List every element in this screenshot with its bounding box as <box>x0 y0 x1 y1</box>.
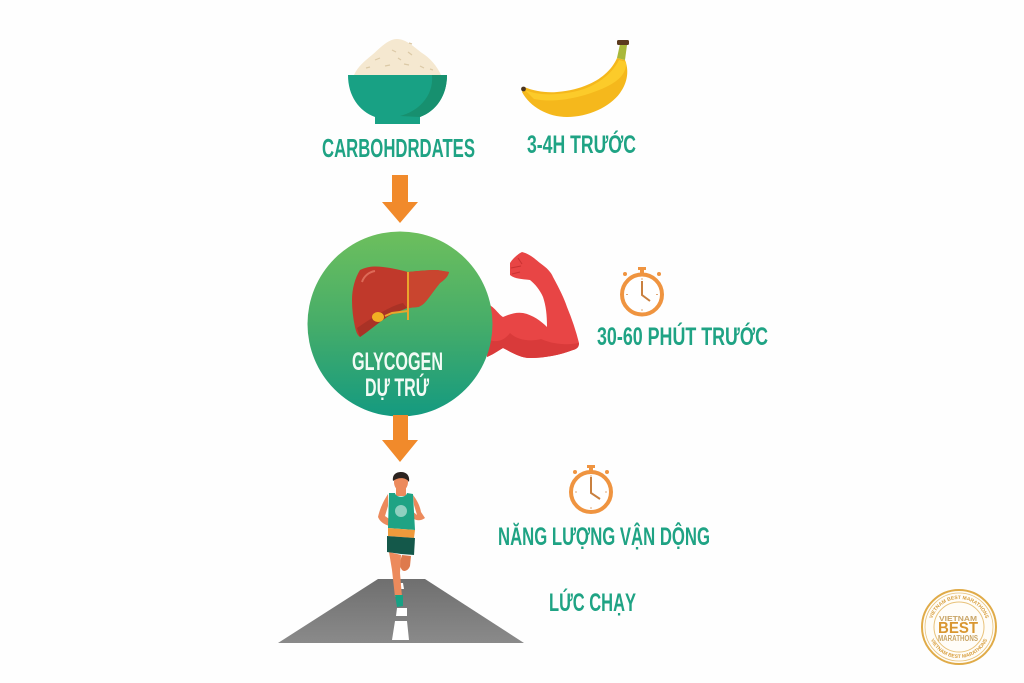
icon: banana <box>521 40 629 117</box>
panel: glycogen circle <box>308 232 492 416</box>
label: reserve: DỰ TRỨ <box>365 372 429 402</box>
badge: best marathons: BEST <box>938 620 978 637</box>
arms <box>378 494 425 526</box>
front leg <box>389 552 402 597</box>
road dashes <box>392 583 409 640</box>
badge: best marathons: VIETNAM BEST MARATHONS <box>929 596 989 618</box>
icon: runner <box>378 472 425 607</box>
singlet <box>388 493 415 530</box>
belt <box>388 528 415 538</box>
badge: best marathons: VIETNAM <box>939 616 977 623</box>
icon: liver <box>352 266 449 337</box>
shoe <box>395 595 403 607</box>
label: glycogen: GLYCOGEN <box>352 348 443 376</box>
label: while running: LỨC CHẠY <box>549 587 636 617</box>
badge: best marathons <box>921 589 997 665</box>
badge: best marathons: MARATHONS <box>938 634 979 643</box>
badge: best marathons: VIETNAM BEST MARATHONS <box>931 638 987 658</box>
label: 30-60 minutes: 30-60 PHÚT TRƯỚC <box>597 321 768 351</box>
icon: flexed arm <box>487 252 579 358</box>
icon: stopwatch two <box>571 465 611 512</box>
label: banana timing: 3-4H TRƯỚC <box>527 129 636 159</box>
back leg <box>399 555 411 571</box>
icon: rice bowl <box>348 39 447 124</box>
label: movement energy: NĂNG LƯỢNG VẬN DỘNG <box>498 521 710 551</box>
arrow: carbs to glycogen <box>382 175 418 223</box>
shorts <box>387 536 415 555</box>
label: carbohydrates: CARBOHDRDATES <box>322 133 475 163</box>
road <box>278 579 524 643</box>
head <box>394 473 408 491</box>
icon: stopwatch one <box>622 267 662 314</box>
arrow: glycogen to running <box>382 415 418 462</box>
